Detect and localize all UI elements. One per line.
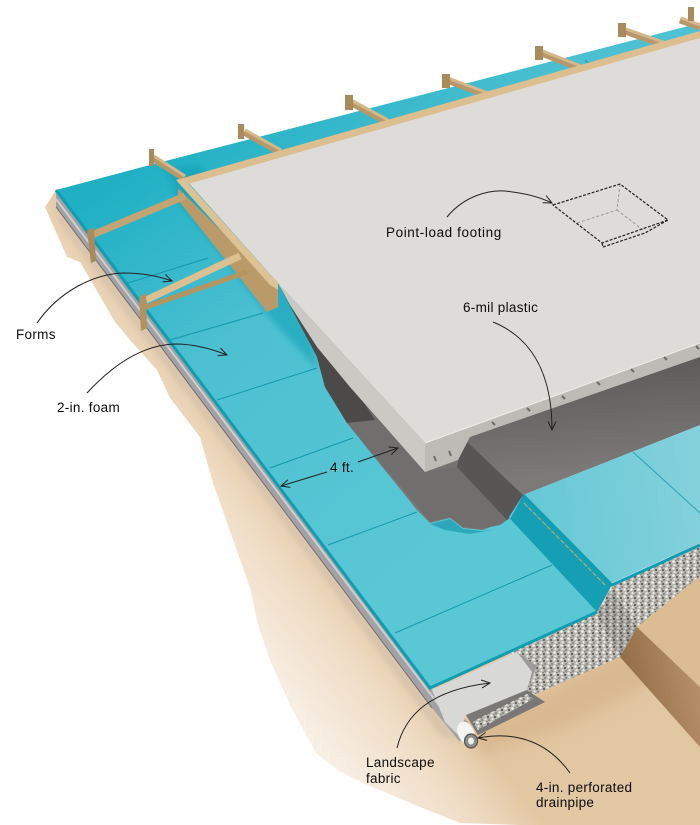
soil ground bbox=[45, 190, 700, 825]
foam edge layers bbox=[56, 190, 468, 742]
callout: 4 ft. dimension bbox=[281, 448, 398, 486]
point-load footing dashed outline bbox=[553, 184, 668, 247]
callout: landscape fabric bbox=[366, 683, 490, 786]
trench cut in soil bbox=[620, 575, 700, 747]
foam, right panel bbox=[523, 425, 700, 585]
callout: forms bbox=[16, 273, 172, 342]
callout: point-load footing bbox=[386, 191, 552, 240]
callout: 6-mil plastic bbox=[463, 300, 552, 430]
back form strip bbox=[176, 31, 700, 184]
callout: drainpipe: drainpipe bbox=[536, 795, 594, 810]
side stakes bbox=[87, 228, 96, 263]
side braces bbox=[92, 196, 185, 235]
callout: forms: Forms bbox=[16, 327, 56, 342]
side form board bbox=[178, 188, 278, 312]
callout: point-load footing: Point-load footing bbox=[386, 225, 502, 240]
6-mil plastic bbox=[278, 280, 700, 534]
callout: landscape fabric: Landscape bbox=[366, 755, 435, 770]
landscape fabric bbox=[432, 652, 545, 735]
callout: 2-in. foam: 2-in. foam bbox=[57, 400, 120, 415]
drainpipe bbox=[454, 719, 478, 748]
callout: drainpipe: 4-in. perforated bbox=[536, 780, 632, 795]
callout: 6-mil plastic: 6-mil plastic bbox=[463, 300, 538, 315]
wood forms bbox=[87, 7, 700, 331]
callout: drainpipe bbox=[478, 736, 632, 810]
crushed gravel bed bbox=[470, 545, 700, 722]
callout: landscape fabric: fabric bbox=[366, 771, 401, 786]
2-in. foam, main panel bbox=[56, 23, 700, 688]
back stakes and braces bbox=[153, 20, 700, 178]
rebar ends bbox=[434, 346, 699, 461]
callout: 2-in. foam bbox=[57, 344, 227, 415]
foam in thickened edge trench bbox=[510, 495, 612, 612]
callout: 4 ft. dimension: 4 ft. bbox=[330, 460, 354, 475]
concrete slab bbox=[186, 35, 700, 472]
